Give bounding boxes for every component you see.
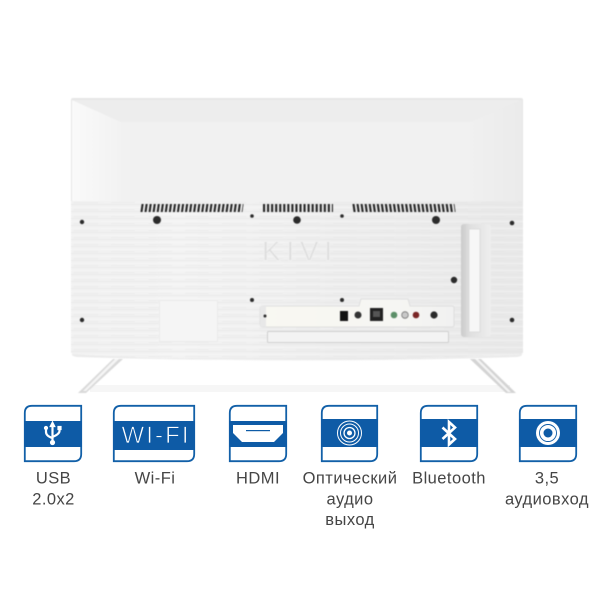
- label: 3.5 audio input: аудиовход: [505, 490, 589, 508]
- lower ribbed panel: [71, 201, 523, 360]
- red rca: [413, 312, 419, 318]
- label: 3.5 audio input: 3,5: [535, 470, 559, 488]
- label: Bluetooth: Bluetooth: [412, 470, 486, 488]
- KIVI logo: KIVI: [262, 236, 332, 266]
- floor shadow: [90, 385, 510, 392]
- icon: Bluetooth: [420, 406, 478, 461]
- optical port: [340, 311, 348, 321]
- icon: 3.5 audio input: [519, 406, 577, 461]
- port bay: [260, 299, 454, 327]
- green rca: [391, 312, 397, 318]
- headphone jack: [354, 312, 362, 318]
- icon: Wi-Fi: [113, 406, 195, 461]
- label: optical audio output: Оптический: [303, 470, 397, 488]
- TV illustration: [71, 98, 523, 393]
- cover plate: [160, 300, 218, 342]
- icon: HDMI: [229, 406, 287, 461]
- label: optical audio output: выход: [325, 511, 375, 529]
- icon: optical audio: [321, 406, 378, 461]
- icon: Wi-Fi: WI-FI: [122, 422, 188, 449]
- label: HDMI: HDMI: [236, 470, 280, 488]
- white rca: [402, 312, 408, 318]
- side handle recess: [461, 224, 491, 337]
- lower slot: [268, 332, 448, 342]
- mounting screws: [80, 214, 514, 322]
- label: USB: USB: [36, 470, 71, 488]
- label: Wi-Fi: Wi-Fi: [135, 470, 175, 488]
- label: USB: 2.0x2: [32, 490, 75, 508]
- upper housing: [71, 98, 523, 203]
- icon: right stand leg: [470, 359, 516, 393]
- label: optical audio output: аудио: [327, 490, 373, 508]
- ethernet port: [370, 308, 383, 321]
- icon: left stand leg: [78, 359, 123, 393]
- icon: USB: [24, 406, 82, 461]
- coax port: [430, 311, 438, 319]
- ventilation slots: [141, 204, 455, 212]
